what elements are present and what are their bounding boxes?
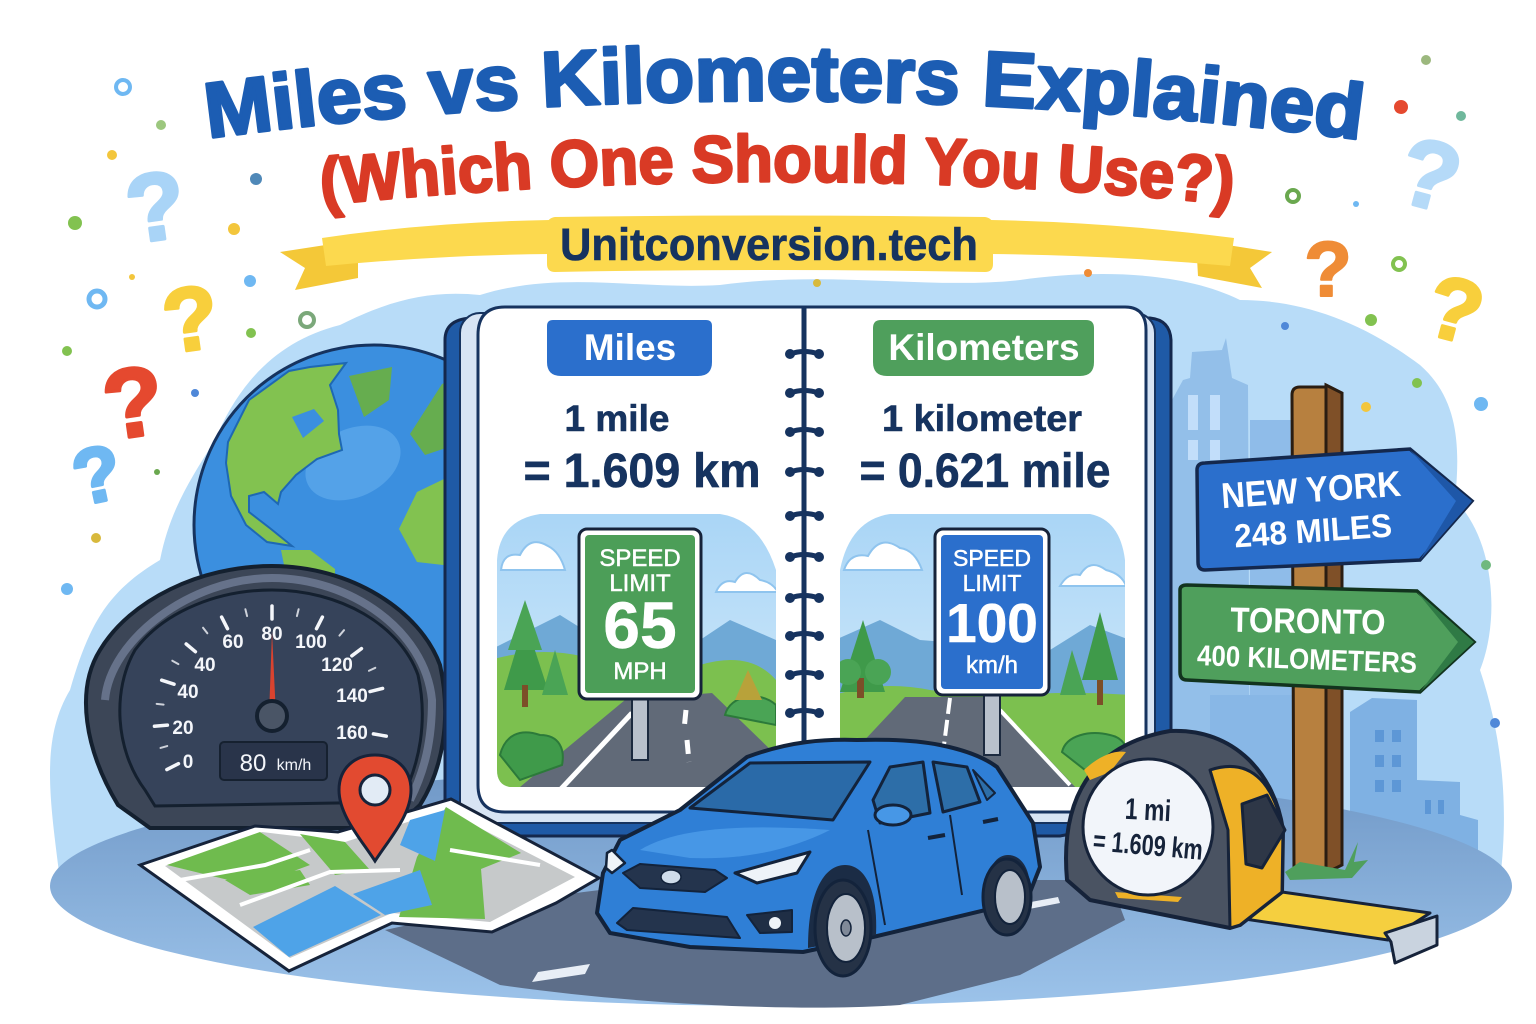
dial face: [120, 590, 422, 806]
speed limit 100 sign: 100: [946, 592, 1038, 654]
left headlight: [606, 850, 625, 873]
needle: [269, 632, 276, 716]
kilometers conversion: [860, 398, 1110, 498]
city skyline: [1172, 338, 1478, 850]
map roads: [180, 850, 540, 905]
tape blade: [1238, 892, 1430, 940]
toronto sign: TORONTO: [1230, 601, 1386, 642]
fog light: [747, 910, 792, 933]
map sheet: [140, 799, 599, 971]
scene: miles road: [490, 510, 785, 790]
page edges: [460, 313, 1155, 823]
question marks: [65, 116, 1494, 523]
speed limit 100 post: [984, 692, 1000, 755]
yellow panel: [1210, 766, 1283, 928]
blade tip: [1385, 916, 1437, 963]
road dashes: [532, 897, 1060, 982]
road map: [140, 755, 599, 971]
right ribbon band: [990, 220, 1234, 266]
speed limit 100 sign: km/h: [966, 652, 1018, 679]
digital readout: 80: [240, 750, 266, 777]
title line 2: (Which One Should You Use?): [322, 132, 1232, 219]
notebook: [445, 307, 1171, 836]
north america: [226, 363, 346, 546]
speed limit 65 sign: SPEED: [599, 545, 681, 572]
brake lock: [1242, 795, 1285, 868]
new york sign: 248 MILES: [1233, 507, 1393, 554]
speed limit 100 sign: LIMIT: [963, 570, 1021, 596]
front side window: [873, 762, 930, 823]
new york sign: NEW YORK: [1220, 463, 1402, 516]
cover: [445, 318, 1171, 836]
top yellow accent: [1084, 752, 1126, 780]
car body: [597, 740, 1040, 952]
gauge labels: 120: [321, 655, 353, 676]
speed limit 65 sign: MPH: [613, 658, 667, 685]
speedometer: [86, 566, 445, 828]
rear wheel: [983, 859, 1031, 935]
africa: [399, 479, 444, 565]
lower grille: [617, 908, 740, 938]
confetti dots: [61, 55, 1500, 728]
greenland: [349, 367, 392, 417]
left page: [478, 307, 803, 812]
tape label: 1 mi: [1124, 793, 1172, 828]
gauge labels: 160: [336, 723, 368, 744]
kilometers badge: [873, 320, 1094, 376]
gauge labels: 60: [222, 632, 244, 653]
miles conversion: 1 mile: [565, 398, 669, 439]
gauge labels: 140: [336, 686, 368, 707]
south america: [281, 550, 335, 574]
miles conversion: = 1.609 km: [524, 445, 760, 498]
speed limit 65 sign: 65: [603, 588, 677, 662]
badge: [661, 870, 681, 884]
gauge labels: 40: [177, 682, 199, 703]
europe: [410, 384, 444, 455]
map greens: [167, 807, 521, 919]
speed limit 65 post: [632, 695, 648, 760]
rear side window: [933, 762, 980, 812]
speed limit 65 sign: LIMIT: [609, 570, 671, 597]
digital readout: [220, 742, 327, 780]
location pin: [339, 755, 411, 861]
ocean highlight: [306, 426, 400, 500]
right headlight: [735, 852, 810, 883]
tape measure: [1066, 731, 1437, 963]
mirror: [875, 805, 911, 825]
rim highlight: [105, 578, 432, 800]
website: Unitconversion.tech: [560, 219, 978, 270]
miles conversion: [524, 398, 760, 498]
toronto sign: 400 KILOMETERS: [1197, 640, 1417, 680]
windshield: [690, 762, 870, 820]
front wheel: [815, 880, 871, 976]
miles badge: [547, 320, 712, 376]
gauge labels: 100: [295, 632, 327, 653]
globe: [192, 344, 444, 672]
door handles: [928, 819, 998, 838]
right page: [805, 307, 1146, 812]
tape label: [1083, 759, 1213, 895]
gauge labels: 0: [183, 752, 193, 773]
scene: kilometers road: [835, 510, 1130, 790]
tape label: = 1.609 km: [1092, 825, 1204, 867]
question marks: ?: [119, 150, 192, 264]
question marks: ?: [1304, 225, 1352, 313]
quarter window: [973, 770, 995, 800]
tape case: [1066, 731, 1283, 928]
hood shade: [640, 827, 830, 858]
title line 1: Miles vs Kilometers Explained: [205, 44, 1364, 140]
grass tuft: [1285, 842, 1368, 880]
kilometers conversion: = 0.621 mile: [860, 445, 1110, 498]
rear wheel arch: [984, 855, 1030, 908]
map water: [253, 810, 445, 957]
question marks: ?: [96, 344, 171, 461]
digital readout: km/h: [277, 757, 311, 774]
question marks: ?: [1416, 255, 1494, 364]
gauge labels: 80: [261, 624, 283, 645]
spiral binding: [785, 307, 824, 745]
question marks: ?: [1388, 116, 1472, 235]
ground: [50, 766, 1512, 1006]
toronto sign: [1180, 585, 1474, 692]
speed limit 100 sign: [935, 529, 1049, 695]
gauge labels: 20: [172, 718, 194, 739]
signpost: [1180, 385, 1474, 880]
banner plate: [547, 216, 993, 272]
grille: [623, 864, 727, 892]
map land: [165, 810, 575, 958]
left ribbon band: [322, 220, 550, 266]
needle hub: [257, 701, 287, 731]
banner: [280, 216, 1272, 290]
wooden post: [1292, 385, 1342, 873]
front wheel arch: [808, 865, 876, 948]
lower yellow accent: [1115, 892, 1182, 902]
kilometers conversion: 1 kilometer: [882, 398, 1082, 439]
speed limit 100 sign: SPEED: [953, 545, 1031, 571]
miles badge: Miles: [584, 327, 676, 368]
blue car: [597, 740, 1040, 976]
gauge labels: 40: [194, 655, 216, 676]
door lines: [868, 815, 962, 925]
question marks: ?: [157, 267, 225, 373]
new york sign: [1197, 449, 1472, 570]
background cloud: [50, 274, 1504, 880]
gauge ticks: [154, 606, 386, 770]
right ribbon tail: [1196, 240, 1272, 288]
kilometers badge: Kilometers: [888, 327, 1080, 368]
question marks: ?: [65, 427, 129, 523]
speed limit 65 sign: [579, 529, 701, 699]
speedometer housing: [86, 566, 445, 828]
road: [385, 880, 1125, 1008]
hudson bay: [292, 409, 324, 438]
left ribbon tail: [280, 240, 358, 290]
gauge labels: [172, 624, 368, 773]
